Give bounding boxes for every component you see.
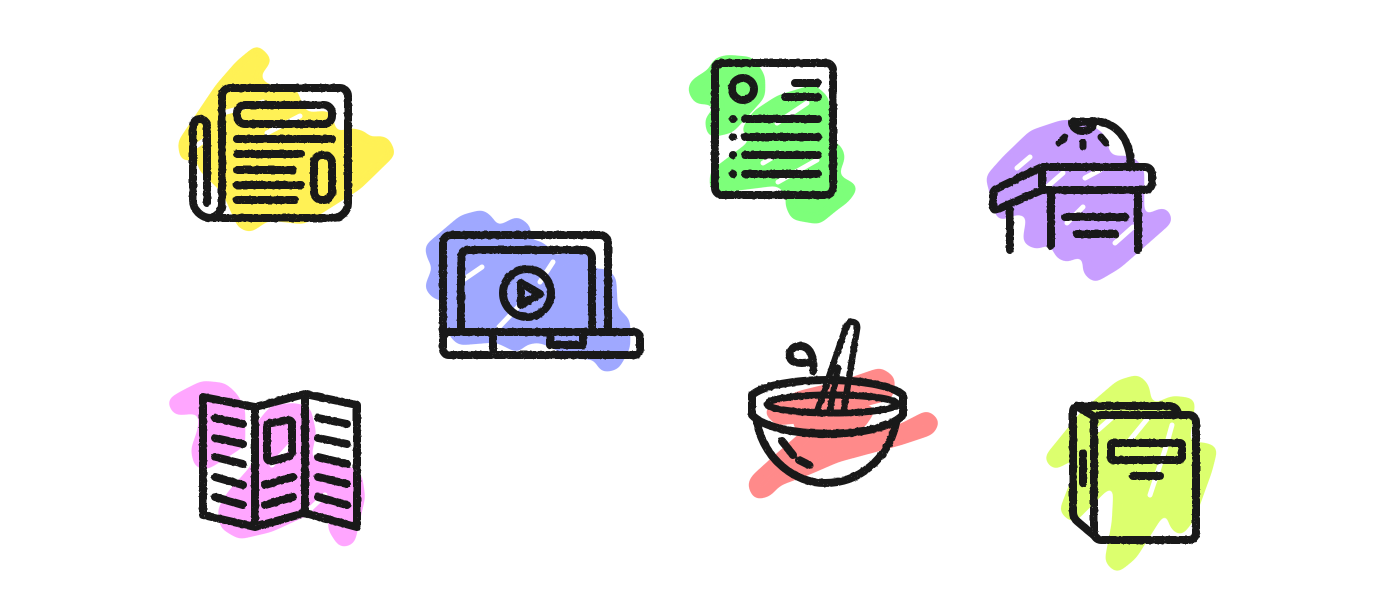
laptop outline xyxy=(443,235,640,355)
icon: resume document xyxy=(693,60,852,219)
document outline xyxy=(715,63,833,195)
pink scribble xyxy=(173,386,360,542)
blue scribble xyxy=(430,215,625,367)
newspaper outline xyxy=(193,88,348,218)
icon: laptop with video xyxy=(430,215,640,367)
brochure outline xyxy=(203,394,357,527)
red scribble xyxy=(753,373,934,494)
book outline xyxy=(1073,406,1196,540)
purple scribble xyxy=(991,125,1167,277)
lime scribble xyxy=(1050,380,1212,567)
icon: desk with lamp xyxy=(991,121,1167,277)
icon: book xyxy=(1050,380,1212,567)
yellow scribble xyxy=(183,51,390,227)
icon: newspaper xyxy=(183,51,390,227)
bowl outline xyxy=(752,322,903,483)
green scribble xyxy=(693,60,852,219)
icon: brochure xyxy=(173,386,360,542)
icon: mixing bowl xyxy=(752,322,934,494)
desk outline xyxy=(993,121,1152,250)
